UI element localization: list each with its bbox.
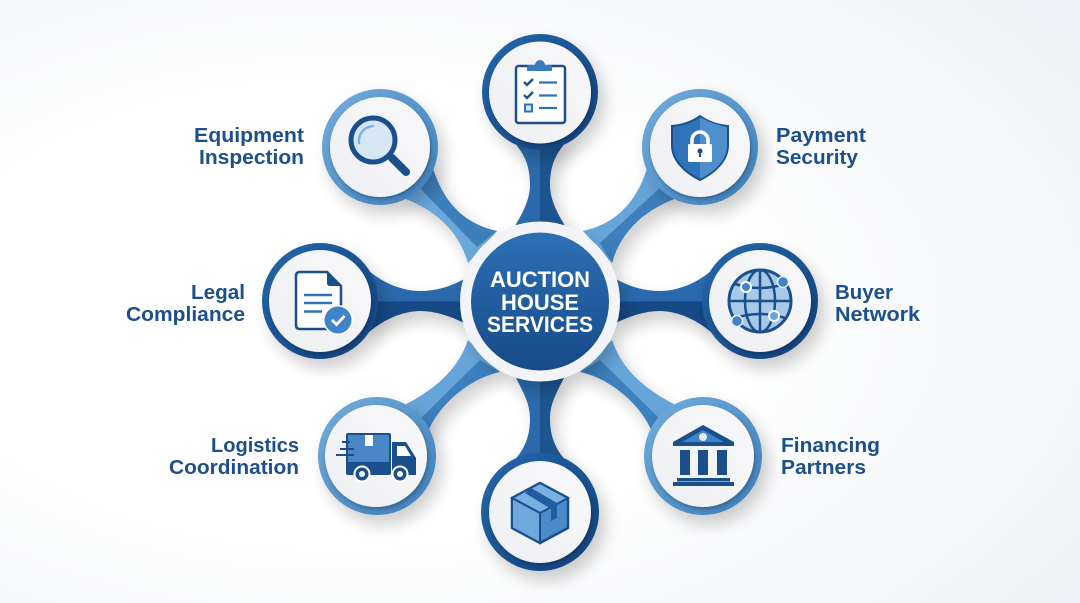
node: legal compliance bbox=[262, 243, 378, 359]
label: legal compliance: Compliance bbox=[126, 304, 245, 326]
label: payment security: Payment bbox=[776, 125, 866, 147]
hub title bbox=[487, 267, 593, 337]
icon: delivery truck bbox=[336, 433, 416, 482]
label: financing partners: Financing bbox=[781, 435, 880, 457]
label: logistics coordination: Coordination bbox=[169, 457, 299, 479]
icon: globe with nodes bbox=[729, 270, 791, 332]
label: equipment inspection bbox=[194, 125, 304, 169]
icon: cardboard box bbox=[512, 483, 568, 543]
label: buyer network: Network bbox=[835, 304, 921, 326]
node: financing partners bbox=[644, 397, 762, 515]
label: buyer network: Buyer bbox=[835, 282, 893, 304]
connectors bbox=[368, 138, 712, 465]
label: payment security: Security bbox=[776, 147, 859, 169]
label: buyer network bbox=[835, 282, 921, 326]
node: checklist bbox=[482, 34, 598, 150]
label: financing partners: Partners bbox=[781, 457, 866, 479]
hub title: AUCTION bbox=[490, 267, 590, 292]
icon: shield with padlock bbox=[672, 116, 728, 180]
hub title: HOUSE bbox=[501, 290, 579, 315]
label: legal compliance: Legal bbox=[191, 282, 245, 304]
label: logistics coordination bbox=[169, 435, 299, 479]
central hub bbox=[460, 222, 620, 382]
node: parcel bbox=[481, 453, 599, 571]
label: equipment inspection: Inspection bbox=[199, 147, 304, 169]
node: logistics coordination bbox=[318, 397, 436, 515]
icon: document with check bbox=[296, 272, 353, 335]
label: logistics coordination: Logistics bbox=[211, 435, 299, 457]
node: payment security bbox=[642, 89, 758, 205]
label: financing partners bbox=[781, 435, 880, 479]
icon: bank building bbox=[673, 425, 734, 486]
icon: magnifying glass bbox=[351, 118, 406, 172]
icon: clipboard checklist bbox=[516, 60, 565, 123]
label: payment security bbox=[776, 125, 866, 169]
hub title: SERVICES bbox=[487, 312, 593, 337]
label: equipment inspection: Equipment bbox=[194, 125, 304, 147]
node: equipment inspection bbox=[322, 89, 438, 205]
node: buyer network bbox=[702, 243, 818, 359]
label: legal compliance bbox=[126, 282, 245, 326]
